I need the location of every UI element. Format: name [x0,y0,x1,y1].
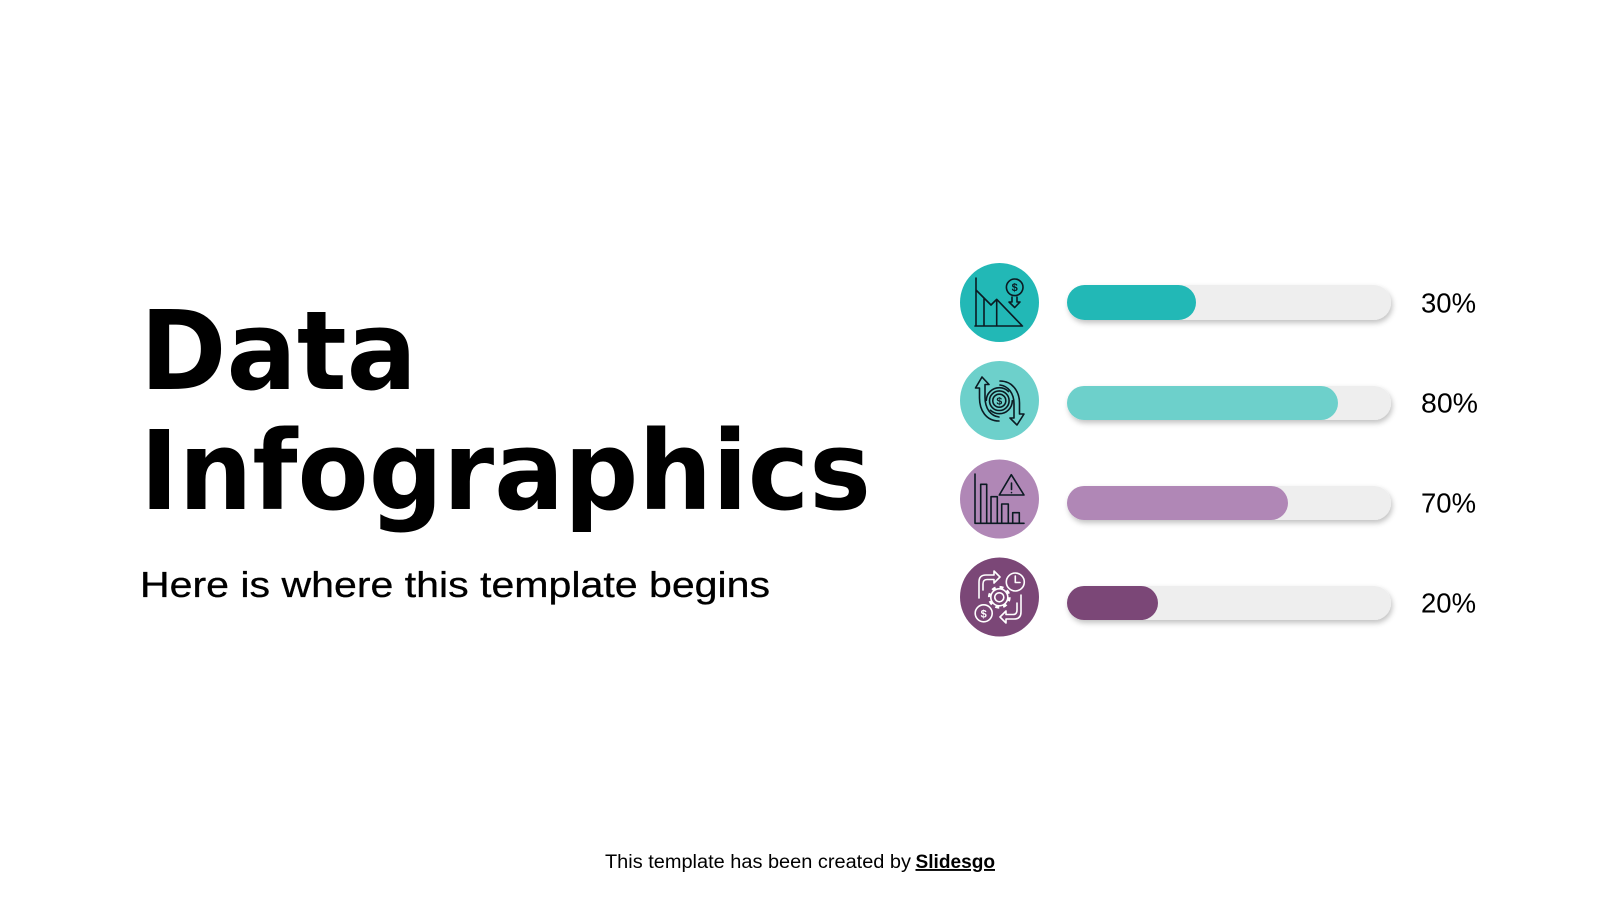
row 2: 80% [960,361,1478,440]
title: Data [140,287,417,415]
row 3: 70% [960,460,1476,538]
icon: circular arrows around dollar coin [960,361,1039,440]
row 1: 30% [960,263,1476,342]
icon: falling chart with dollar coin: $ [1012,282,1018,294]
value: 30%: 30% [1421,288,1476,318]
icon: falling chart with dollar coin [960,263,1039,342]
value: 70%: 70% [1421,488,1476,518]
title [140,287,871,535]
icon: circular arrows around dollar coin: $ [996,396,1002,408]
footer credit: Slidesgo [916,852,995,873]
icon: bar chart with warning triangle [960,460,1039,538]
value: 80%: 80% [1421,388,1478,418]
title: Infographics [140,407,871,535]
bar: 70% [1067,486,1391,520]
icon: gear with clock, coin and cycle arrows [960,558,1039,636]
subtitle: Here is where this template begins [140,564,770,605]
row 4: 20% [960,558,1476,636]
bar: 30% [1067,285,1391,320]
bar: 80% [1067,386,1391,420]
footer credit: This template has been created by [605,852,912,873]
bar: 20% [1067,586,1391,620]
value: 20%: 20% [1421,588,1476,618]
icon: gear with clock, coin and cycle arrows: $ [981,608,987,620]
